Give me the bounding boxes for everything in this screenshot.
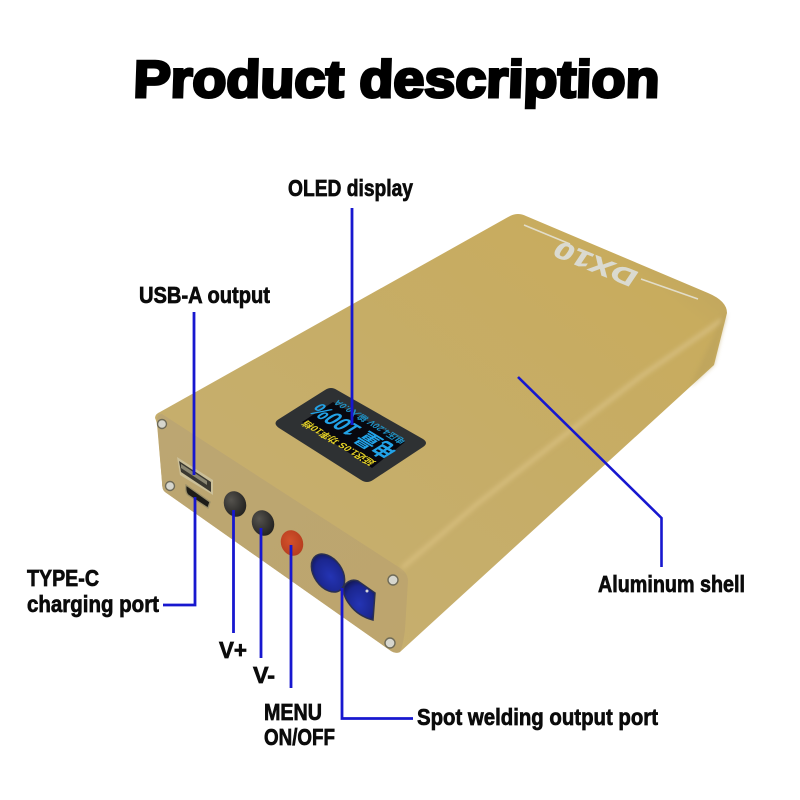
Type-C port bbox=[186, 485, 210, 508]
label: TYPE-C charging port: TYPE-C bbox=[27, 565, 99, 591]
label: V+: V+ bbox=[219, 637, 247, 663]
label: OLED display: OLED display bbox=[288, 175, 413, 201]
button V- bbox=[248, 507, 278, 539]
leader: Type-C bbox=[163, 497, 195, 605]
device: spot welder bbox=[155, 214, 727, 653]
edge highlight bbox=[402, 320, 722, 568]
label: Aluminum shell: Aluminum shell bbox=[598, 571, 745, 597]
leader: aluminum shell bbox=[518, 377, 662, 567]
logo: DX10 bbox=[524, 225, 698, 299]
leader: MENU bbox=[290, 545, 292, 688]
label: MENU ON/OFF: ON/OFF bbox=[264, 724, 335, 750]
corner shade bbox=[690, 313, 727, 387]
label: MENU ON/OFF bbox=[264, 699, 335, 750]
leader: V- bbox=[260, 528, 262, 658]
spot welding port bbox=[304, 548, 375, 620]
label: TYPE-C charging port bbox=[27, 565, 159, 617]
screen row: voltage: 电压4.20V 输入0.0A bbox=[331, 398, 409, 446]
screws bbox=[158, 420, 398, 648]
label: V-: V- bbox=[253, 662, 275, 688]
leader: V+ bbox=[232, 510, 235, 633]
body and top face bbox=[155, 214, 727, 653]
logo: DX10: DX10 bbox=[548, 236, 643, 291]
title: Product description bbox=[133, 51, 661, 109]
label: MENU ON/OFF: MENU bbox=[264, 699, 322, 725]
leader: USB-A output bbox=[193, 312, 195, 475]
button V+ bbox=[220, 488, 250, 520]
screen row: time and power: 延迟1.0S 功率10档 bbox=[298, 419, 379, 467]
front face bbox=[157, 414, 408, 653]
leader: spot welding output bbox=[342, 588, 413, 718]
label: Spot welding output port: Spot welding output port bbox=[417, 704, 658, 730]
button MENU bbox=[277, 527, 307, 559]
label: TYPE-C charging port: charging port bbox=[27, 591, 159, 617]
label: USB-A output: USB-A output bbox=[139, 282, 270, 308]
OLED display bbox=[276, 388, 426, 482]
USB-A port bbox=[177, 457, 213, 495]
screen row: battery: 电量 100% bbox=[303, 400, 405, 462]
leader: OLED display bbox=[351, 208, 353, 425]
